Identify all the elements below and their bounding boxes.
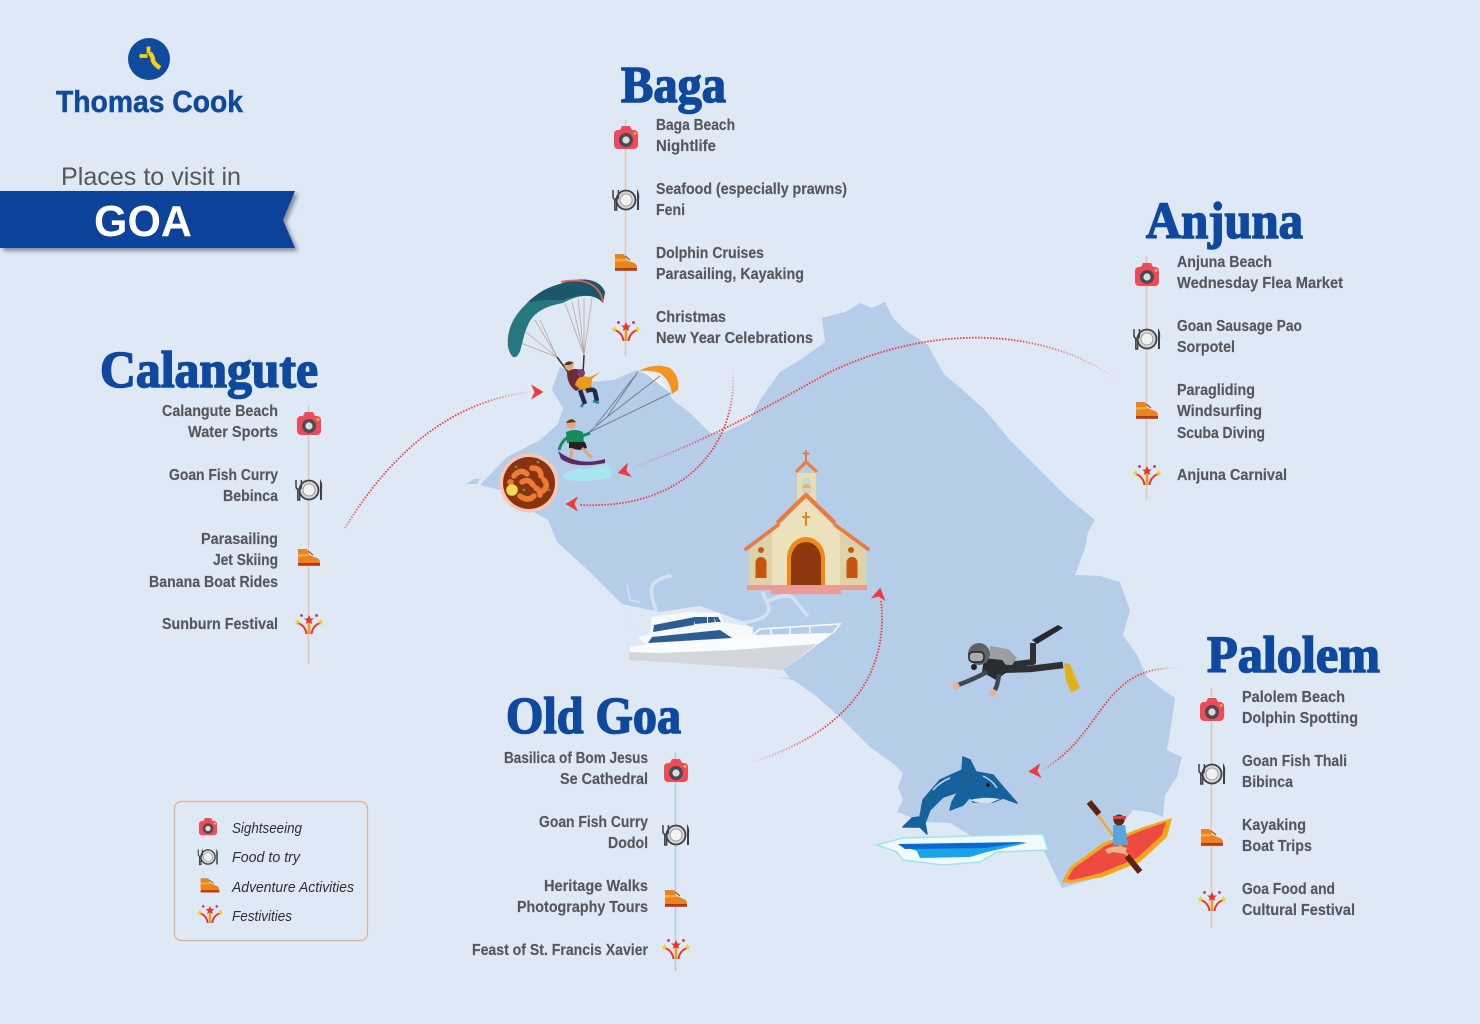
logo emblem	[128, 38, 170, 80]
Anjuna sightseeing	[1135, 254, 1343, 292]
Baga adventure	[615, 245, 804, 283]
Baga food	[613, 181, 847, 219]
legend: food to try: Food to try	[232, 850, 301, 866]
water splash	[877, 834, 1048, 865]
panel: Old Goa	[472, 688, 690, 971]
Calangute food: Bebinca	[223, 488, 278, 505]
route arrow: Baga	[566, 368, 733, 512]
ribbon	[0, 191, 295, 248]
legend: sightseeing: Sightseeing	[232, 821, 302, 837]
illustration: dolphin with splash	[877, 757, 1048, 865]
Calangute adventure: Parasailing	[201, 531, 278, 548]
legend: food to try	[198, 849, 301, 866]
legend: adventure activities	[201, 878, 354, 896]
heading: Old Goa: Old Goa	[506, 688, 681, 745]
Baga sightseeing: Nightlife	[656, 138, 716, 155]
route arrow: Palolem	[1028, 668, 1180, 779]
Calangute food	[169, 467, 322, 505]
Calangute sightseeing: Water Sports	[188, 424, 278, 441]
illustration: yacht	[629, 612, 840, 670]
route arrow: Calangute	[345, 384, 544, 528]
Anjuna sightseeing: Wednesday Flea Market	[1177, 275, 1343, 292]
Anjuna food: Goan Sausage Pao	[1177, 318, 1302, 335]
illustration: scuba diver	[952, 625, 1080, 697]
title word: GOA	[94, 197, 192, 246]
Old Goa festivities: Feast of St. Francis Xavier	[472, 942, 648, 959]
Calangute festivities	[162, 614, 324, 634]
Old Goa food: Dodol	[608, 835, 648, 852]
Anjuna food	[1134, 318, 1302, 356]
logo wordmark: Thomas Cook	[56, 84, 244, 119]
Old Goa sightseeing: Se Cathedral	[560, 771, 648, 788]
Calangute food: Goan Fish Curry	[169, 467, 278, 484]
map of Goa	[466, 302, 1182, 888]
Anjuna adventure: Scuba Diving	[1177, 425, 1265, 442]
subtitle: Places to visit in	[61, 163, 241, 191]
Anjuna sightseeing: Anjuna Beach	[1177, 254, 1272, 271]
Calangute festivities: Sunburn Festival	[162, 616, 278, 633]
Baga sightseeing	[614, 117, 735, 155]
Palolem festivities	[1198, 881, 1355, 919]
Baga adventure: Dolphin Cruises	[656, 245, 764, 262]
heading: Calangute: Calangute	[100, 342, 318, 399]
Old Goa sightseeing	[504, 750, 688, 788]
Anjuna festivities: Anjuna Carnival	[1177, 467, 1287, 484]
Anjuna adventure	[1136, 382, 1265, 442]
panel: Baga	[612, 57, 847, 356]
title: Places to visit in GOA	[0, 163, 295, 248]
Palolem sightseeing: Dolphin Spotting	[1242, 710, 1358, 727]
Palolem festivities: Cultural Festival	[1242, 902, 1355, 919]
route arrow: Anjuna	[616, 338, 1118, 480]
Anjuna festivities	[1132, 465, 1287, 485]
route arrow: Old Goa	[752, 586, 888, 762]
Baga food: Seafood (especially prawns)	[656, 181, 847, 198]
Anjuna adventure: Paragliding	[1177, 382, 1255, 399]
Palolem sightseeing	[1200, 689, 1358, 727]
Calangute adventure	[149, 531, 320, 591]
Old Goa adventure: Photography Tours	[517, 899, 648, 916]
heading: Palolem: Palolem	[1207, 627, 1380, 684]
Anjuna adventure: Windsurfing	[1177, 403, 1262, 420]
Baga festivities: New Year Celebrations	[656, 330, 813, 347]
illustration: church	[746, 450, 868, 594]
illustration: kayaker	[1062, 802, 1172, 883]
Palolem adventure	[1201, 817, 1312, 855]
legend	[174, 802, 368, 940]
legend: festivities	[197, 905, 292, 925]
legend: festivities: Festivities	[232, 909, 292, 925]
Old Goa food	[539, 814, 689, 852]
Palolem food	[1199, 753, 1347, 791]
illustration: paraglider	[508, 280, 605, 407]
Calangute sightseeing	[162, 403, 321, 441]
Calangute adventure: Banana Boat Rides	[149, 574, 278, 591]
heading: Anjuna: Anjuna	[1146, 193, 1303, 250]
panel: Anjuna	[1132, 193, 1343, 500]
panel: Calangute	[100, 342, 324, 664]
Palolem sightseeing: Palolem Beach	[1242, 689, 1345, 706]
Calangute adventure: Jet Skiing	[213, 552, 278, 569]
legend: sightseeing	[199, 818, 302, 837]
Baga festivities	[612, 309, 813, 347]
Palolem festivities: Goa Food and	[1242, 881, 1335, 898]
illustration: prawn curry bowl	[500, 454, 558, 512]
Old Goa food: Goan Fish Curry	[539, 814, 648, 831]
illustration: kite surfer	[558, 366, 678, 481]
Palolem food: Goan Fish Thali	[1242, 753, 1347, 770]
Old Goa sightseeing: Basilica of Bom Jesus	[504, 750, 648, 767]
Palolem adventure: Kayaking	[1242, 817, 1306, 834]
Anjuna food: Sorpotel	[1177, 339, 1235, 356]
Calangute sightseeing: Calangute Beach	[162, 403, 278, 420]
Palolem food: Bibinca	[1242, 774, 1293, 791]
Baga adventure: Parasailing, Kayaking	[656, 266, 804, 283]
Old Goa adventure	[517, 878, 687, 916]
Baga food: Feni	[656, 202, 685, 219]
Old Goa adventure: Heritage Walks	[544, 878, 648, 895]
Baga sightseeing: Baga Beach	[656, 117, 735, 134]
logo: Thomas Cook	[56, 38, 244, 119]
Palolem adventure: Boat Trips	[1242, 838, 1312, 855]
Baga festivities: Christmas	[656, 309, 726, 326]
panel: Palolem	[1198, 627, 1380, 928]
heading: Baga: Baga	[621, 57, 726, 114]
legend: adventure activities: Adventure Activities	[231, 880, 354, 896]
